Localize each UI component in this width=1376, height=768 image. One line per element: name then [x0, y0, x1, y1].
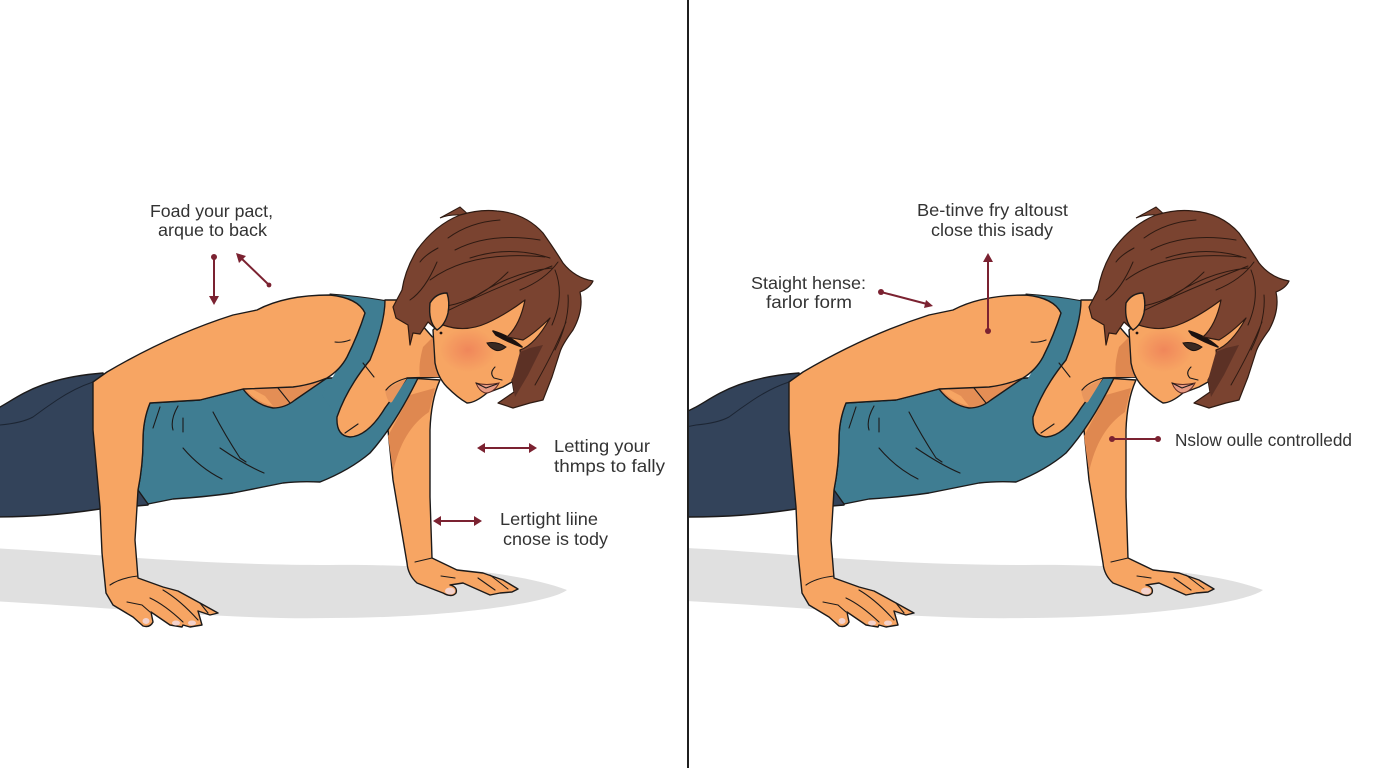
near arm and shoulder — [93, 295, 365, 627]
far arm — [388, 378, 518, 596]
callout: left top text: Foad your pact, — [150, 201, 273, 221]
tank top torso — [138, 378, 418, 504]
callout: slow and controlled: Nslow oulle controlledd — [1175, 430, 1352, 450]
arrow: vertical up — [983, 253, 993, 334]
panel: left figure — [0, 207, 593, 627]
nose — [492, 367, 502, 380]
callout: right top text: Be-tinve fry altoust — [917, 200, 1068, 220]
callout: straight tense: farlor form — [766, 292, 852, 312]
hair — [393, 207, 593, 408]
ear — [430, 293, 449, 330]
mouth — [476, 383, 499, 393]
arrow: double arrow line — [433, 516, 482, 526]
callout: right top text — [917, 200, 1068, 240]
callout: letting your thumbs — [554, 436, 665, 476]
callout: letting your thumbs: thmps to fally — [554, 456, 665, 476]
arrow: diagonal up-left — [236, 253, 271, 287]
callout: left top text: arque to back — [158, 220, 267, 240]
head and face — [433, 295, 552, 403]
arrow: diagonal to shoulder — [878, 289, 933, 308]
floor shadow — [0, 548, 567, 618]
callout: left top text — [150, 201, 273, 240]
tank top strap — [322, 294, 387, 417]
eye — [487, 342, 506, 351]
callout: straight line: cnose is tody — [503, 529, 608, 549]
arrow: horizontal from arm — [1109, 436, 1161, 442]
callout: straight line — [500, 509, 608, 549]
panel: right figure — [686, 207, 1289, 627]
mole — [440, 332, 442, 334]
callout: straight tense: Staight hense: — [751, 273, 866, 293]
callout: straight line: Lertight liine — [500, 509, 598, 529]
arrow: double arrow thumbs — [477, 443, 537, 453]
callout: letting your thumbs: Letting your — [554, 436, 650, 456]
callout: right top text: close this isady — [931, 220, 1053, 240]
leggings — [0, 373, 150, 517]
center divider — [687, 0, 689, 768]
chest and neck — [337, 300, 450, 437]
eyebrow — [493, 331, 522, 347]
arrow: vertical down — [209, 254, 219, 305]
callout: straight tense — [751, 273, 866, 312]
